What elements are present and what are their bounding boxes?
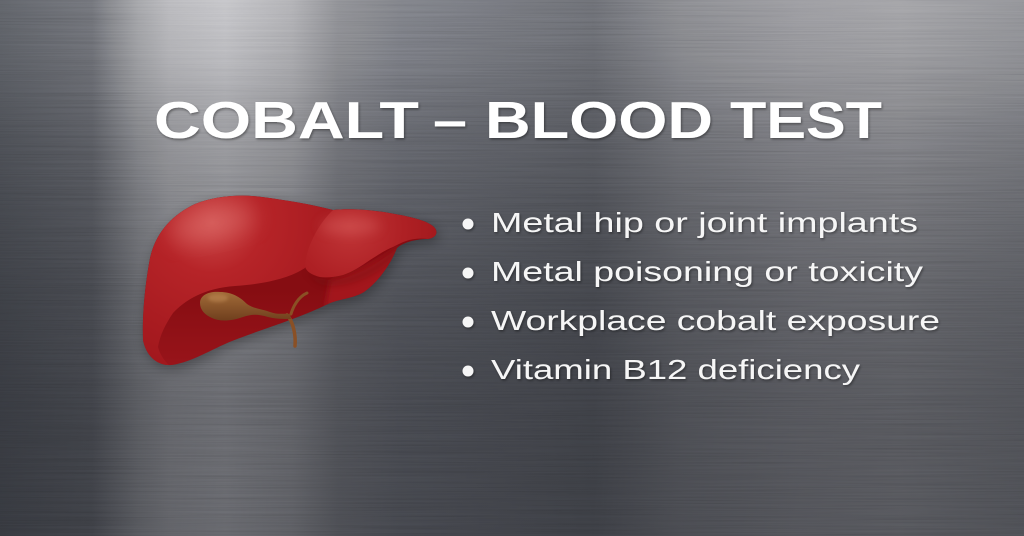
title: – [433, 92, 467, 150]
gallbladder [200, 292, 307, 346]
list item: workplace cobalt exposure: Workplace cobalt exposure [491, 305, 940, 336]
list item: metal poisoning or toxicity: Metal poisoning or toxicity [491, 256, 923, 287]
left lobe [305, 209, 436, 277]
title: BLOOD [485, 92, 713, 150]
left lobe shadow [325, 248, 396, 287]
list item: metal hip or joint implants: Metal hip or joint implants [491, 207, 918, 238]
title: COBALT [154, 92, 419, 150]
list item: metal hip or joint implants [462, 207, 918, 238]
right lobe [135, 196, 333, 372]
list item: metal poisoning or toxicity [462, 256, 923, 287]
title: TEST [730, 92, 882, 150]
title [154, 92, 882, 150]
list item: vitamin B12 deficiency: Vitamin B12 deficiency [491, 354, 860, 385]
bullet list [462, 207, 940, 385]
icon: liver illustration [135, 196, 438, 372]
